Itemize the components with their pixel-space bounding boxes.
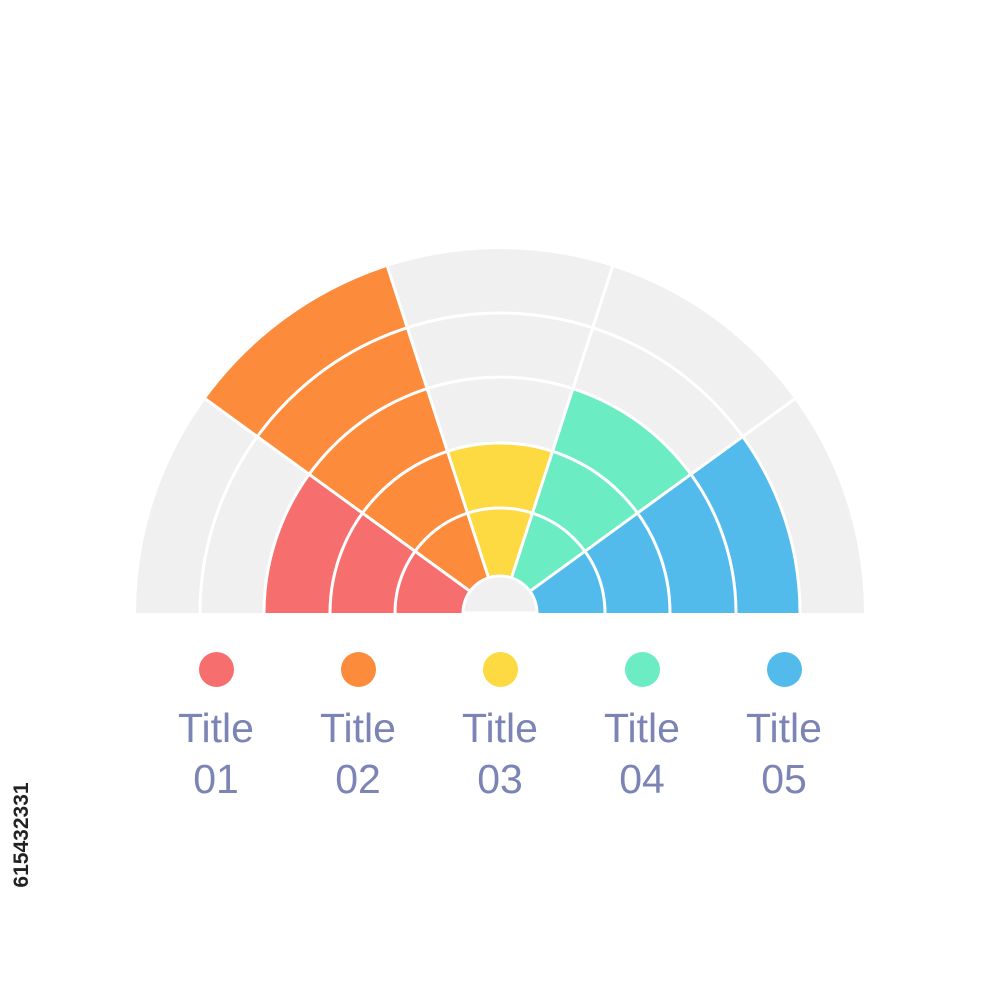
- legend item 01: Title: [178, 705, 254, 751]
- legend item 04: [604, 652, 680, 802]
- legend item 01: [178, 652, 254, 802]
- sector: Title 01 red: [264, 474, 500, 613]
- sector: Title 03 yellow: [448, 443, 552, 613]
- legend item 04: 04: [619, 756, 665, 802]
- legend item 02: Title: [320, 705, 396, 751]
- legend item 05: Title: [746, 705, 822, 751]
- legend item 05: 05: [761, 756, 807, 802]
- legend item 03: 03: [477, 756, 523, 802]
- sector: Title 04 green: [500, 388, 691, 613]
- sector: Title 05 blue: [500, 437, 800, 613]
- legend item 02: 02: [335, 756, 381, 802]
- legend item 03: Title: [462, 705, 538, 751]
- legend item 03: [462, 652, 538, 802]
- chart background semicircle: [136, 249, 864, 613]
- stock id vertical text: 615432331: [10, 782, 33, 888]
- legend item 01: 01: [193, 756, 239, 802]
- legend item 04: Title: [604, 705, 680, 751]
- legend item 02: [320, 652, 396, 802]
- sector: Title 02 orange: [206, 267, 500, 613]
- center hub: [463, 576, 537, 613]
- legend item 05: [746, 652, 822, 802]
